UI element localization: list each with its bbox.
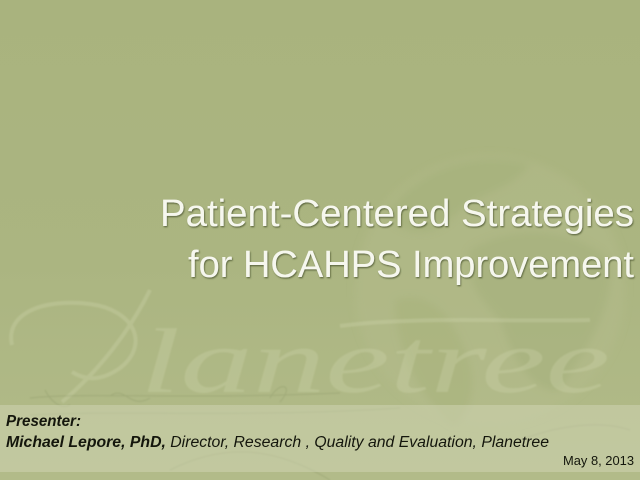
watermark: script name: lanetree — [140, 310, 610, 412]
presenter name and role: Michael Lepore, PhD, Director, Research , Quality and Evaluation, Planetree — [6, 434, 549, 451]
presenter band — [0, 405, 640, 472]
watermark: script name — [11, 290, 610, 412]
watermark: globe — [355, 155, 625, 425]
date: May 8, 2013 — [563, 453, 634, 468]
watermark: handwriting — [30, 387, 630, 480]
presenter label: Presenter: — [6, 413, 81, 430]
title: Patient-Centered Strategies — [160, 193, 634, 235]
title: for HCAHPS Improvement — [188, 244, 634, 286]
title — [160, 193, 634, 286]
